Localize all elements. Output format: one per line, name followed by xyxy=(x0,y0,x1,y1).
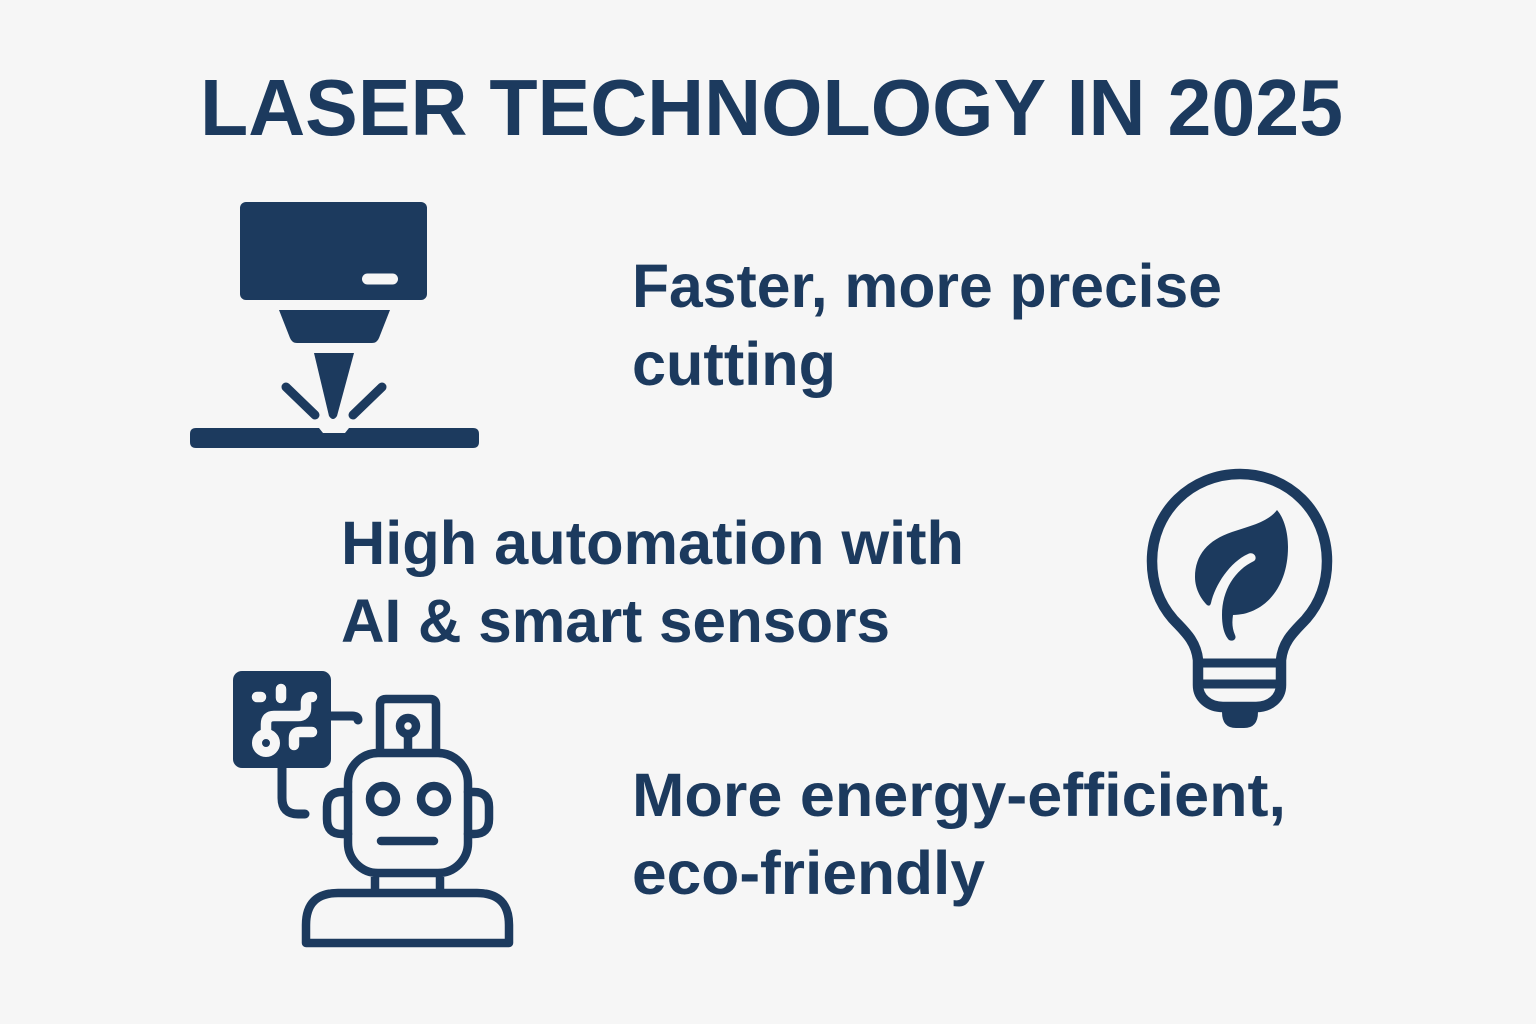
text: faster cutting xyxy=(632,252,1222,398)
text: energy efficiency: More energy-efficient, xyxy=(632,761,1286,829)
icon: leaf xyxy=(1195,510,1288,641)
title: LASER TECHNOLOGY IN 2025 xyxy=(200,63,1343,152)
icon: light bulb with leaf xyxy=(1152,474,1327,728)
text: automation: AI & smart sensors xyxy=(341,587,890,655)
text: energy efficiency: eco-friendly xyxy=(632,839,985,907)
text: automation xyxy=(341,509,964,655)
text: automation: High automation with xyxy=(341,509,964,577)
circuit board xyxy=(233,671,358,814)
icon: robot with circuit board xyxy=(233,671,509,943)
text: energy efficiency xyxy=(632,761,1286,907)
icon: laser cutter head xyxy=(190,202,479,448)
text: faster cutting: Faster, more precise xyxy=(632,252,1222,320)
robot xyxy=(306,699,509,943)
text: faster cutting: cutting xyxy=(632,330,836,398)
